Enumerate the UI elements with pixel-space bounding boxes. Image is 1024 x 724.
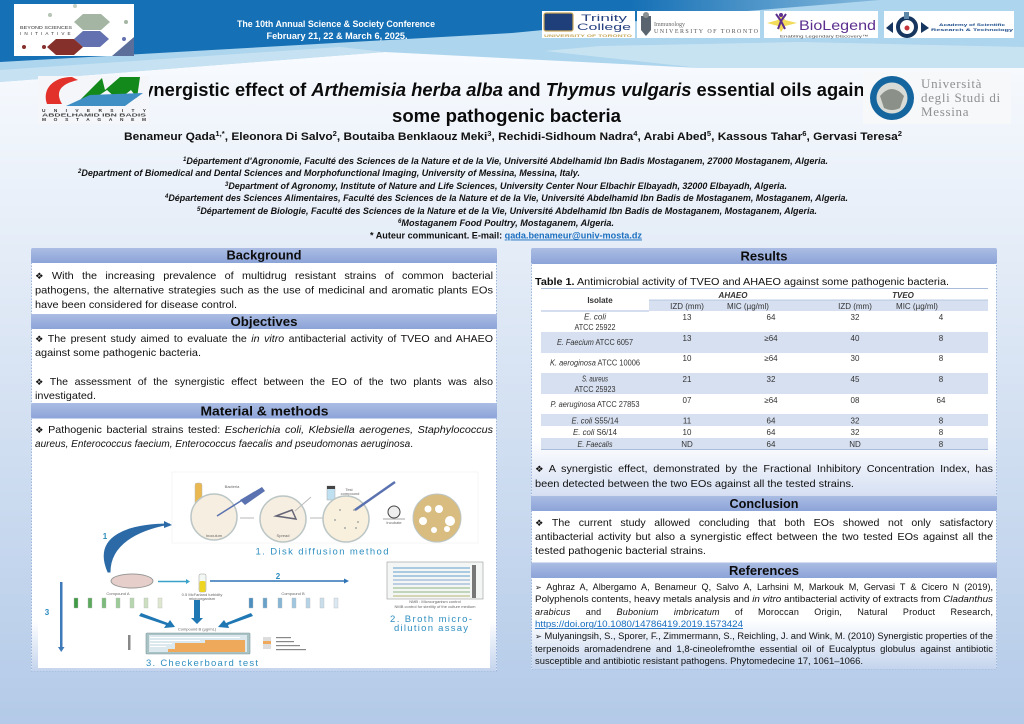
heading: Conclusion: Conclusion (730, 496, 799, 511)
isolate column: E. coli (584, 312, 606, 322)
heading: References (531, 562, 997, 578)
heading: Objectives: Objectives (230, 314, 298, 329)
TVEO IZD values: 08 (851, 396, 860, 405)
affiliations: 2 (77, 169, 82, 175)
text: references: arabicus and Bubonium imbricatum of Moroccan Origin, Natural Product Research, (535, 607, 993, 617)
TVEO IZD values (849, 313, 861, 449)
AHAEO MIC values: 64 (767, 313, 776, 322)
poster title: some pathogenic bacteria (392, 106, 622, 126)
AHAEO MIC values: 64 (767, 440, 776, 449)
arrow 3: 3 (45, 608, 50, 617)
logo: University of Mostaganem: MOSTAGANEM (42, 117, 146, 123)
AHAEO IZD values: 13 (683, 313, 692, 322)
logo: Università degli Studi di Messina: degli Studi di (921, 90, 1001, 105)
TVEO IZD values: 30 (851, 354, 860, 363)
AHAEO IZD values: 10 (683, 428, 692, 437)
table caption: Table 1. Antimicrobial activity of TVEO and AHAEO against some pathogenic bacteria. (535, 277, 949, 288)
logo: University of Mostaganem: UNIVERSITY (42, 108, 147, 114)
text: conclusion: antibacterial activity but also a synergistic effect between the two tested EOs against all the (535, 532, 993, 543)
text: background: pathogens, the alternative strategies such as the use of medicinal and aromatic plants EOs (35, 286, 493, 296)
TVEO MIC values: 8 (939, 416, 944, 426)
arrow 1: 1 (103, 532, 108, 541)
AHAEO MIC values: ≥64 (764, 354, 778, 363)
table header: IZD (mm) (670, 302, 704, 311)
TVEO MIC values: 64 (937, 396, 946, 405)
affiliations: Department of Agronomy, Institute of Nature and Life Sciences, University Center Nour Elbachir Elbayadh, 32000 Elbayadh, Algeria. (228, 181, 787, 191)
logo: University of Mostaganem (38, 76, 149, 124)
heading: Conclusion (531, 496, 997, 511)
affiliations: Département d'Agronomie, Faculté des Sciences de la Nature et de la Vie, Université Abdelhamid Ibn Badis Mostaganem, 27000 Mostaganem, Algeria. (186, 156, 828, 166)
text: background (35, 271, 493, 311)
text: synergistic finding: ❖ A synergistic effect, demonstrated by the Fractional Inhibitory Concentration Index, has (535, 464, 993, 475)
isolate column: E. coli S6/14 (573, 428, 618, 437)
conference title (237, 19, 435, 41)
isolate column: K. aeroginosa ATCC 10006 (550, 358, 641, 368)
text: objectives: ❖ The assessment of the synergistic effect between the EO of the two plants was also (35, 377, 493, 388)
panel: left column (31, 248, 497, 671)
isolate column: ATCC 25923 (574, 385, 616, 394)
text: materials: aureus, Enterococcus faecium, Enterococcus faecalis and pseudomonas aeruginosa. (35, 439, 413, 450)
arrow 2 (210, 572, 349, 584)
text: objectives: investigated. (35, 391, 96, 402)
isolate column: E. Faecium ATCC 6057 (557, 338, 634, 347)
broth microdilution plate (387, 562, 483, 609)
table header (587, 291, 938, 311)
text: synergistic finding: been detected between the two EOs against all the tested strains. (535, 479, 854, 490)
text: objectives: ❖ The present study aimed to evaluate the in vitro antibacterial activity of TVEO and AHAEO (35, 334, 493, 345)
table header: TVEO (892, 291, 915, 300)
TVEO MIC values: 8 (939, 440, 944, 449)
AHAEO IZD values: 21 (683, 375, 692, 384)
isolate column: E. Faecalis (578, 440, 612, 449)
isolate column: P. aeruginosa ATCC 27853 (550, 400, 640, 409)
poster title: Synergistic effect of Arthemisia herba alba and Thymus vulgaris essential oils against (131, 80, 881, 100)
text: references: https://doi.org/10.1080/14786419.2019.1573424 (535, 619, 743, 629)
text: objectives: against some pathogenic bacteria. (35, 348, 201, 359)
authors: 2 (333, 131, 337, 138)
affiliations: Department of Biomedical and Dental Sciences and Morphofunctional Imaging, University of Messina, Messina, Italy. (81, 168, 580, 178)
authors: 2 (898, 131, 902, 138)
compound A tubes (74, 591, 162, 608)
text: objectives (35, 334, 493, 402)
TVEO MIC values: 8 (939, 354, 944, 363)
disk diffusion illustration: Spread (277, 533, 289, 538)
arrow 3 (45, 582, 64, 652)
logo: Trinity College: Trinity (581, 13, 627, 24)
disk diffusion illustration (172, 472, 478, 543)
AHAEO MIC values: 64 (767, 428, 776, 437)
disk diffusion illustration: Test (345, 487, 354, 492)
AHAEO IZD values: 11 (683, 416, 692, 426)
TVEO IZD values: 45 (851, 375, 860, 384)
caption: broth micro-dilution assay (390, 614, 472, 634)
TVEO IZD values: ND (849, 440, 861, 449)
logo: Trinity College: College (577, 22, 631, 33)
text: conclusion (535, 518, 994, 557)
affiliations: 3 (225, 182, 229, 188)
authors: , Arabi Abed (638, 131, 707, 143)
logo: Trinity College (542, 11, 635, 38)
conference title: The 10th Annual Science & Society Conference (237, 19, 435, 29)
AHAEO MIC values: ≥64 (764, 334, 778, 343)
culture tube (182, 574, 222, 601)
affiliations: Département des Sciences Alimentaires, Faculté des Sciences de la Nature et de la Vie, Université Abdelhamid Ibn Badis de Mostaganem, Mostaganem, Algeria. (168, 193, 848, 203)
text: background: ❖ With the increasing prevalence of multidrug resistant strains of common bacterial (35, 271, 493, 282)
heading: Background (31, 248, 497, 263)
table header: MIC (µg/ml) (727, 302, 769, 311)
poster title (131, 80, 881, 126)
heading: References: References (729, 563, 799, 578)
TVEO IZD values: 32 (851, 428, 860, 437)
text: background: have been considered for disease control. (35, 300, 237, 311)
authors: , Kassous Tahar (711, 131, 803, 143)
heading: Objectives (31, 314, 497, 329)
text: materials (35, 425, 493, 450)
table header: IZD (mm) (838, 302, 872, 311)
authors: 6 (802, 131, 807, 138)
arrows to checkerboard (139, 600, 253, 628)
logo: Academy of Scientific Research and Technology: Academy of Scientific (939, 22, 1006, 27)
compound A tubes: Compound A (106, 591, 130, 596)
TVEO MIC values: 8 (939, 334, 944, 343)
AHAEO MIC values: ≥64 (764, 396, 778, 405)
authors: , Gervasi Teresa (807, 131, 899, 143)
AHAEO MIC values (764, 313, 778, 449)
caption: broth micro-dilution assay: dilution assay (394, 623, 468, 634)
authors: 1,* (215, 131, 225, 138)
caption: disk diffusion method: 1. Disk diffusion method (256, 546, 388, 558)
logo: Università degli Studi di Messina (863, 72, 1011, 124)
text: references: Polyphenols contents, heavy metals analysis and in vitro antibacterial activity of extracts from Cladanthus (535, 594, 994, 604)
conference title: February 21, 22 & March 6, 2025. (266, 31, 408, 41)
AHAEO MIC values: 32 (767, 375, 776, 384)
affiliations: 4 (164, 194, 169, 200)
isolate column (550, 312, 641, 449)
compound B tubes (249, 591, 338, 608)
text: references (535, 582, 994, 666)
caption: broth micro-dilution assay: 2. Broth micro- (390, 614, 472, 625)
isolate column: S. aureus (582, 374, 608, 384)
logo: University of Mostaganem: ABDELHAMID IBN BADIS (42, 112, 146, 118)
arrow to tube (158, 579, 190, 584)
methods diagram (45, 472, 483, 669)
compound B tubes: Compound B (281, 591, 305, 596)
affiliations: Département de Biologie, Faculté des Sciences de la Nature et de la Vie, Université Abdelhamid Ibn Badis de Mostaganem, Mostaganem, Algeria. (200, 206, 817, 216)
table header: Isolate (587, 296, 613, 305)
panel: right column (531, 248, 997, 669)
broth microdilution plate: NMB control for sterility of the culture medium (395, 604, 476, 609)
text: materials: ❖ Pathogenic bacterial strains tested: Escherichia coli, Klebsiella aerogenes, Staphylococcus (35, 425, 493, 436)
isolate column: E. coli S55/14 (572, 416, 619, 426)
authors: 3 (487, 131, 492, 138)
logo: Beyond Sciences Initiative: INITIATIVE (20, 31, 72, 36)
petri dish (111, 574, 153, 588)
affiliations: 6 (398, 219, 402, 225)
heading: Results: Results (740, 248, 788, 264)
disk diffusion illustration: Incubate (386, 520, 402, 525)
disk diffusion illustration: compound (341, 491, 359, 496)
culture tube: microorganism (189, 596, 216, 601)
broth microdilution plate: NMB : Microorganism control (409, 599, 461, 604)
text: references: ➢ Mulyaningsih, S., Sporer, F., Zimmermann, S., Reichling, J. and Wink, M. (2010) Synergistic properties of the (535, 631, 993, 641)
logo: Trinity College: UNIVERSITY OF TORONTO (544, 34, 632, 38)
text: synergistic finding (535, 464, 993, 490)
authors: 4 (633, 131, 638, 138)
TVEO IZD values: 32 (851, 313, 860, 322)
AHAEO IZD values: 10 (683, 354, 692, 363)
affiliations: Mostaganem Food Poultry, Mostaganem, Algeria. (401, 218, 614, 228)
authors: 5 (707, 131, 711, 138)
logo: Università degli Studi di Messina: Messina (921, 104, 969, 119)
logo: Immunology University of Toronto: UNIVERSITY OF TORONTO (654, 29, 759, 35)
table header: AHAEO (718, 291, 748, 300)
arrow 1 (103, 521, 172, 572)
TVEO MIC values (937, 313, 946, 449)
authors: , Rechidi-Sidhoum Nadra (492, 131, 634, 143)
authors: , Eleonora Di Salvo (225, 131, 333, 143)
header banner (0, 0, 1024, 82)
affiliations: 5 (197, 207, 201, 213)
table header: MIC (µg/ml) (896, 302, 938, 311)
logo: Immunology University of Toronto (637, 11, 760, 38)
AHAEO MIC values: 64 (767, 416, 776, 426)
checkerboard plate (128, 626, 306, 654)
TVEO MIC values: 8 (939, 428, 944, 437)
TVEO IZD values: 32 (851, 416, 860, 426)
logo: Academy of Scientific Research and Technology (884, 11, 1015, 38)
heading: Background: Background (226, 248, 302, 262)
logo: BioLegend: BioLegend (799, 18, 876, 33)
text: references: ➢ Aghraz A, Albergamo A, Benameur Q, Salvo A, Larhsini M, Markouk M, Gervasi T & Cicero N (2019), (535, 582, 993, 592)
corresponding author: * Auteur communicant. E-mail: qada.benameur@univ-mosta.dz (370, 230, 642, 240)
logo: Beyond Sciences Initiative: BEYOND SCIENCES (20, 25, 72, 30)
authors: Benameur Qada (124, 131, 208, 143)
isolate column: ATCC 25922 (574, 323, 616, 332)
disk diffusion illustration: Bacteria (225, 484, 240, 489)
logo: Università degli Studi di Messina: Università (921, 76, 982, 91)
AHAEO IZD values (681, 313, 693, 449)
logo: Academy of Scientific Research and Technology: Research & Technology (931, 27, 1015, 32)
heading: Material & methods: Material & methods (200, 404, 328, 418)
logo: BioLegend (764, 11, 878, 38)
logo: Immunology University of Toronto: Immunology (654, 22, 685, 28)
text: conclusion: tested pathogenic bacterial strains. (535, 546, 706, 557)
heading: Material & methods (31, 403, 497, 418)
arrow 2: 2 (276, 572, 281, 581)
affiliations (77, 156, 848, 228)
caption: checkerboard test: 3. Checkerboard test (146, 658, 258, 669)
disk diffusion illustration: Inoculum (206, 533, 223, 538)
AHAEO IZD values: 13 (683, 334, 692, 343)
heading: Results (531, 248, 997, 264)
AHAEO IZD values: ND (681, 440, 693, 449)
authors: , Boutaiba Benklaouz Meki (337, 131, 487, 143)
text: conclusion: ❖ The current study allowed concluding that both EOs showed not only satisfactory (535, 518, 994, 529)
TVEO MIC values: 8 (939, 375, 944, 384)
logo: Beyond Sciences Initiative (14, 4, 134, 56)
TVEO MIC values: 4 (939, 313, 944, 322)
table 1 (541, 288, 988, 450)
text: references: susceptible and antibiotic resistant pathogens. Phytomedecine 17, 1061–1066. (535, 656, 863, 666)
affiliations: 1 (183, 157, 187, 163)
AHAEO IZD values: 07 (683, 396, 692, 405)
culture tube: 0.5 McFarland turbidity (182, 592, 222, 597)
TVEO IZD values: 40 (851, 334, 860, 343)
checkerboard plate: Compound B (µg/mL) (178, 626, 217, 632)
text: references: terpenoids aromadendrene and 1,8-cineolefromthe essential oil of Eucalyptus globulus against antibiotic (535, 644, 994, 654)
logo: BioLegend: Enabling Legendary Discovery™ (780, 34, 868, 38)
